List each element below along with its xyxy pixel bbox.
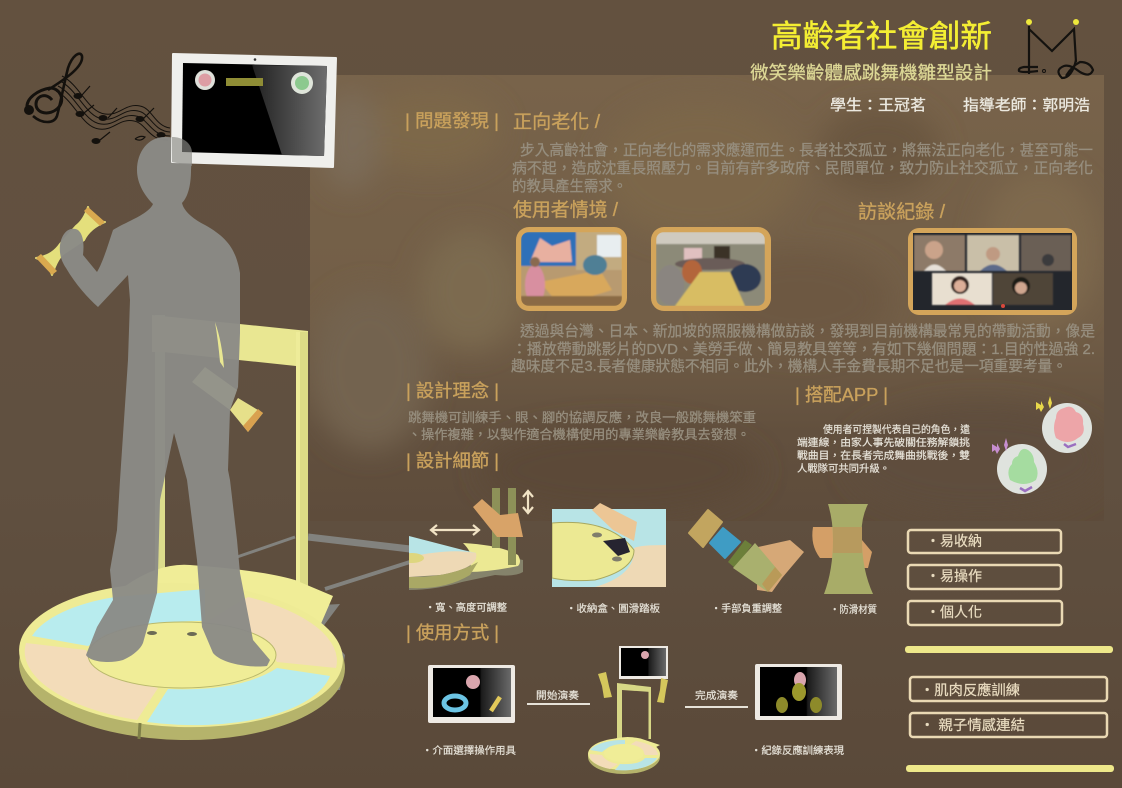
head overlapping tablet [172, 137, 192, 166]
label: material: ・防滑材質 [830, 603, 877, 616]
feature box 1 [908, 530, 1061, 553]
platform shadow [237, 537, 410, 589]
feature box 4 [910, 677, 1107, 701]
paragraph: positive ageing: 的教具產生需求。 [512, 178, 627, 195]
paragraph: positive ageing: 病不起，造成沈重長照壓力。目前有許多政府、民間單位，致力防止社交孤立，正向老化 [512, 159, 1093, 177]
tablet: choose tools [428, 665, 515, 723]
heading: design concept: | 設計理念 | [406, 381, 499, 401]
heading: problem: | 問題發現 | [405, 111, 499, 131]
pedal cyan top [32, 589, 205, 646]
character green on screen [291, 72, 313, 94]
label: hand weight: ・手部負重調整 [711, 602, 782, 615]
pedal cyan right [147, 668, 330, 725]
photo: activity room [651, 227, 771, 311]
yellow bar 2 [906, 765, 1114, 772]
energy bar on screen [226, 78, 263, 86]
paragraph: app: 戰曲目，在長者完成舞曲挑戰後，雙 [797, 449, 970, 462]
tablet main [172, 54, 336, 167]
feature box 3 [908, 601, 1062, 625]
label: adjustable: ・寬、高度可調整 [425, 601, 507, 614]
photo: video call [908, 228, 1077, 315]
paragraph: interview findings: 透過與台灣、日本、新加坡的照服機構做訪談，發現到目前機構最常見的帶動活動，像是 [520, 323, 1095, 340]
title: 高齡者社會創新 [771, 19, 992, 54]
label: record: ・紀錄反應訓練表現 [751, 744, 844, 757]
label: storage: ・收納盒、圓滑踏板 [566, 602, 660, 615]
paragraph: positive ageing [512, 141, 1093, 195]
feature box 3: ・個人化 [926, 604, 982, 620]
heading: app: | 搭配APP | [795, 385, 888, 405]
small machine [588, 646, 668, 774]
paragraph: interview findings: 趣味度不足3.長者健康狀態不相同。此外，機構人手金費長期不足也是一項重要考量。 [511, 358, 1067, 375]
icon: treble clef and music staff [24, 54, 170, 144]
arrow: height [523, 491, 533, 513]
stand frame [152, 315, 308, 587]
paragraph: interview findings: ：播放帶動跳影片的DVD、美勞手做、簡易教具等等，有如下幾個問題：1.目的性過強 2. [512, 340, 1095, 358]
label: finish: 完成演奏 [695, 689, 738, 702]
center disc [88, 622, 276, 688]
dumbbell left [36, 207, 105, 275]
pedal peach left [25, 643, 158, 720]
tablet: record results [755, 664, 842, 720]
detail image: storage box [552, 503, 666, 587]
paragraph: app: 使用者可捏製代表自己的角色，遠 [823, 423, 970, 436]
heading: usage: | 使用方式 | [406, 623, 499, 643]
photo: classroom [516, 227, 627, 311]
feature box 2 [908, 565, 1061, 589]
label: start: 開始演奏 [536, 689, 579, 702]
paragraph: positive ageing: 步入高齡社會，正向老化的需求應運而生。長者社交孤立，將無法正向老化，甚至可能一 [520, 141, 1093, 159]
heading: user context: 使用者情境 / [513, 199, 619, 221]
paragraph: app: 人戰隊可共同升級。 [797, 462, 890, 475]
label: finish [685, 689, 748, 708]
character pink on screen [195, 70, 215, 90]
detail image: anti-slip material [812, 504, 873, 594]
paragraph: design concept [408, 410, 756, 442]
heading: positive ageing: 正向老化 / [513, 111, 601, 133]
subtitle: 微笑樂齡體感跳舞機雛型設計 [750, 62, 992, 83]
person silhouette [60, 137, 270, 666]
base plate [17, 565, 346, 743]
feature box 5: ・ 親子情感連結 [920, 717, 1025, 733]
background photo panel [310, 75, 1110, 521]
yellow bar 1 [905, 646, 1113, 653]
detail image: hand weight [689, 510, 804, 592]
paragraph: design concept: 跳舞機可訓練手、眼、腳的協調反應，改良一般跳舞機笨重 [408, 410, 756, 425]
icon: green character [992, 438, 1047, 494]
icon: pink character [1036, 396, 1092, 453]
arm slit showing frame [215, 322, 224, 368]
advisor name: 指導老師：郭明浩 [963, 97, 1090, 114]
paragraph: design concept: 、操作複雜，以製作適合機構使用的專業樂齡教具去發想。 [408, 427, 750, 442]
student name: 學生：王冠茗 [830, 96, 926, 114]
machine illustration [17, 315, 346, 743]
pedal peach right [205, 597, 337, 668]
feature box 1: ・易收納 [926, 533, 982, 549]
heading: interview: 訪談紀錄 / [858, 201, 946, 223]
paragraph: app: 端連線，由家人事先破關任務解鎖挑 [797, 436, 970, 449]
icon: logo [1019, 19, 1093, 78]
detail image: adjustable width and height [400, 488, 533, 590]
label: start [527, 689, 590, 705]
dumbbell right [192, 367, 263, 432]
heading: design details: | 設計細節 | [406, 451, 499, 471]
feature box 2: ・易操作 [926, 568, 982, 584]
feature box 5 [910, 713, 1107, 737]
arrow: width [431, 525, 479, 535]
paragraph: interview findings [511, 323, 1095, 375]
paragraph: app [797, 423, 970, 475]
feature box 4: ・肌肉反應訓練 [920, 682, 1020, 698]
label: interface: ・介面選擇操作用具 [422, 744, 516, 757]
